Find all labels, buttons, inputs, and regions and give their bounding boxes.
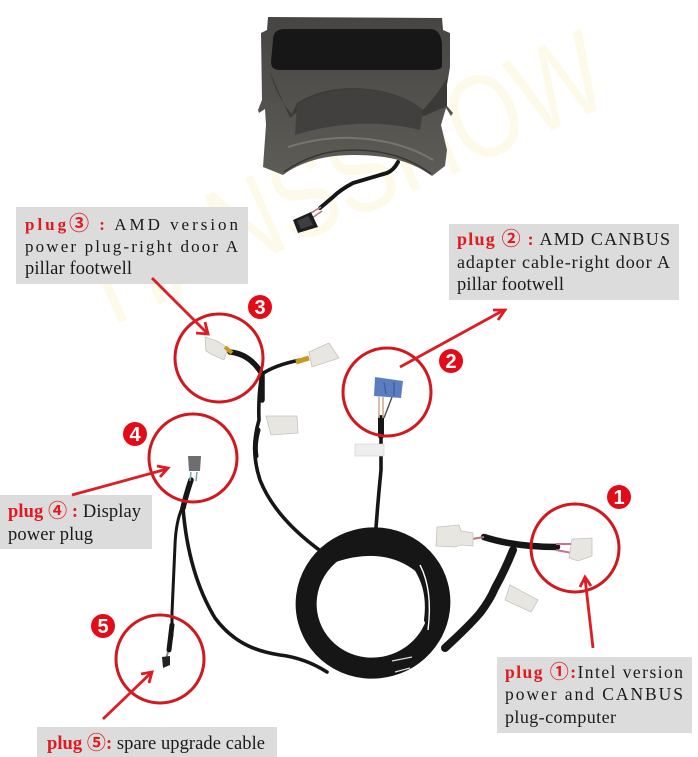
plug 4 label: plug ④ : Display xyxy=(8,496,142,523)
badge 2 xyxy=(439,349,463,373)
badge 5: 5 xyxy=(97,616,109,638)
wiring harness xyxy=(166,352,572,683)
callout circle 5 xyxy=(116,615,204,703)
connector: branch white xyxy=(309,343,339,367)
plug 1 label: plug ①:Intel version xyxy=(505,657,683,684)
cable tag xyxy=(355,444,384,456)
cable to plug 3 branch xyxy=(255,360,322,552)
badge 5 xyxy=(91,614,115,638)
wings xyxy=(270,72,447,118)
callout circle 3 xyxy=(175,314,263,402)
connector: plug 4 xyxy=(188,456,201,471)
badge 2: 2 xyxy=(445,351,457,373)
connector: side white lower xyxy=(505,585,538,612)
arrow: plug 5 xyxy=(103,672,152,719)
arrow: plug 1 xyxy=(580,577,593,648)
plug 1 label xyxy=(497,657,692,733)
connector: plug 2 blue xyxy=(374,377,403,398)
device: display mount housing xyxy=(258,17,453,233)
callout circle 1 xyxy=(531,504,619,592)
plug 4 label xyxy=(0,495,152,549)
badge 1: 1 xyxy=(613,487,625,509)
plug 1 label: power and CANBUS xyxy=(505,684,683,704)
connector: side white xyxy=(266,416,298,435)
coil of cable xyxy=(291,523,455,683)
cable to plug 1 branch xyxy=(445,550,513,648)
arrow: plug 2 xyxy=(400,310,505,367)
arrow: plug 4 xyxy=(72,466,168,495)
plug 2 label: adapter cable-right door A xyxy=(457,252,670,272)
connector: plug 5 xyxy=(162,656,170,668)
device cable xyxy=(320,162,398,208)
connector: plug 1 xyxy=(569,538,592,561)
badge 3 xyxy=(248,295,272,319)
screen xyxy=(271,29,442,70)
plug 2 label: plug ② : AMD CANBUS xyxy=(457,224,670,251)
plug 3 label: plug③ : AMD version xyxy=(25,207,238,236)
cable to plug 4 xyxy=(183,508,327,672)
ridge xyxy=(288,138,433,160)
cable to plug 2 xyxy=(376,420,381,528)
callout circle 4 xyxy=(149,414,237,502)
plug 2 label: pillar footwell xyxy=(457,275,564,295)
badge 3: 3 xyxy=(254,297,266,319)
connector: plug 3 xyxy=(205,337,228,360)
plug 1 label: plug-computer xyxy=(505,707,616,727)
arrow: plug 3 xyxy=(152,278,208,334)
plug 4 label: power plug xyxy=(8,525,93,545)
callout circle 2 xyxy=(343,348,431,436)
plug 3 label: pillar footwell xyxy=(25,259,132,279)
connector: plug 1 left pair xyxy=(436,525,473,547)
plug 3 label xyxy=(16,207,248,284)
cable to plug 5 xyxy=(169,506,183,650)
plug 3 label: power plug-right door A xyxy=(25,237,239,256)
device plug xyxy=(293,212,318,233)
connectors xyxy=(162,337,592,668)
badge 1 xyxy=(607,485,631,509)
badge 4: 4 xyxy=(129,424,141,446)
plug 5 label: plug ⑤: spare upgrade cable xyxy=(47,728,265,755)
plug 2 label xyxy=(449,224,679,300)
badge 4 xyxy=(123,422,147,446)
